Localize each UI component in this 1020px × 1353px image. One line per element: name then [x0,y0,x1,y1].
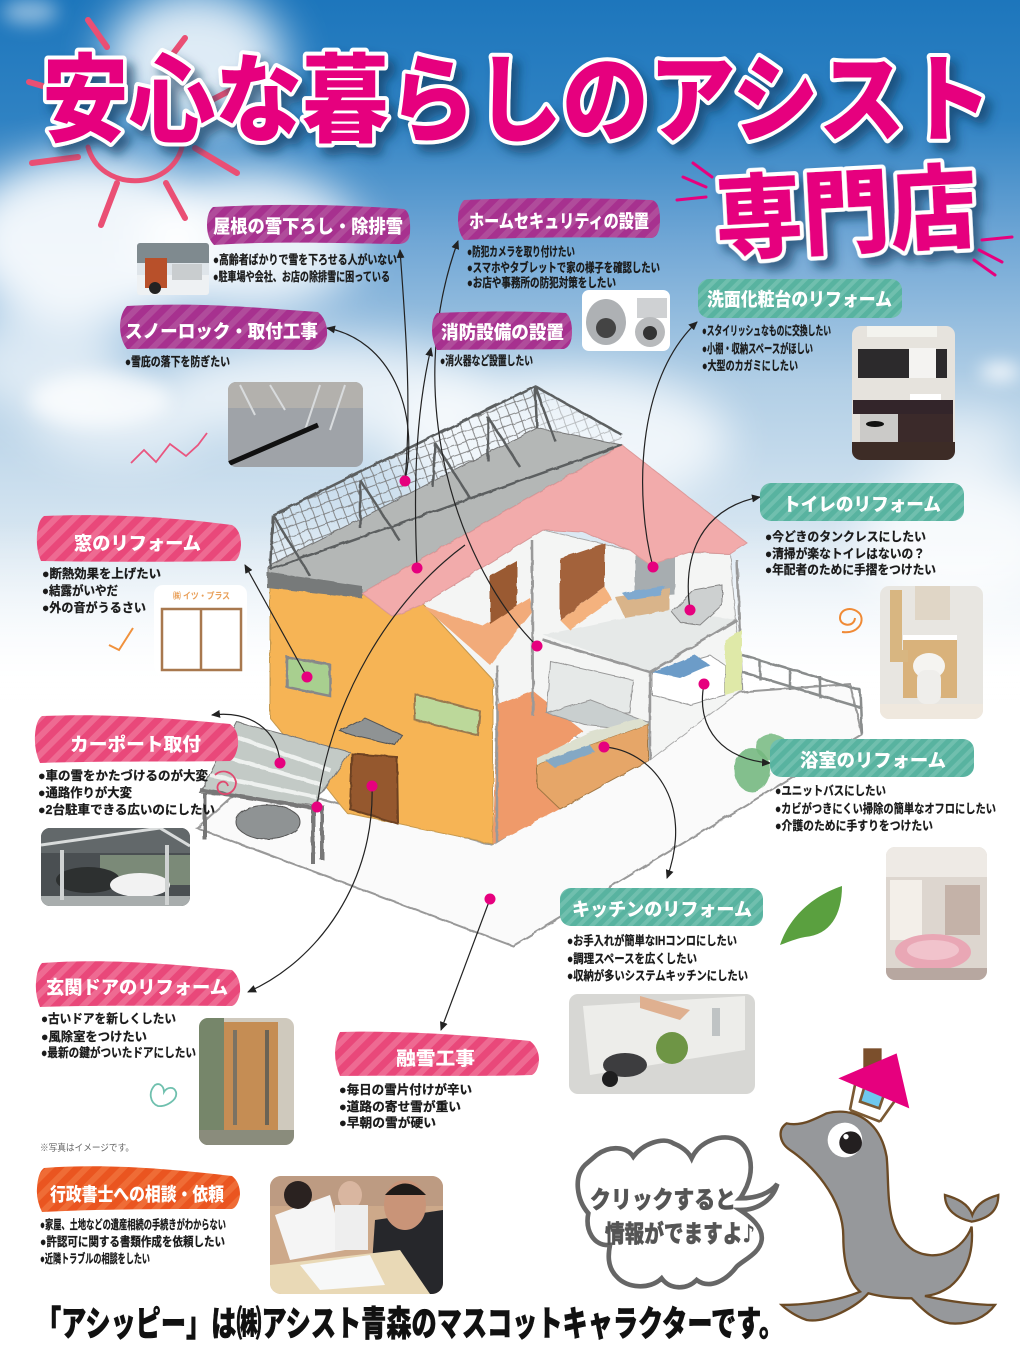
text list: ●風除室をつけたい [41,1029,147,1044]
text list: ●清掃が楽なトイレはないの？ [765,546,925,561]
callout: speech bubble [578,1137,777,1287]
title: 専門店: 専門店 [713,157,980,273]
heading: 行政書士への相談・依頼 [50,1184,224,1205]
roof: pink [362,445,747,617]
text list: ●車の雪をかたづけるのが大変 [38,768,208,783]
kitchen counter [537,724,648,809]
text list: ●高齢者ばかりで雪を下ろせる人がいない [213,252,397,267]
heading: 消防設備の設置 [441,322,564,343]
photo: door [199,1018,294,1145]
text list: ●家屋、土地などの遺産相続の手続きがわからない [40,1217,226,1232]
text list [41,1011,196,1060]
text: ●雪庇の落下を防ぎたい [125,354,230,369]
text list: ●最新の鍵がついたドアにしたい [41,1045,196,1060]
text list [765,529,936,577]
icon: teal heart [151,1084,176,1106]
text list [775,784,996,833]
text list: ●近隣トラブルの相談をしたい [40,1251,150,1266]
photo: carport [41,826,190,906]
panel: kitchen [560,888,763,1094]
panel: snow lock [120,305,363,467]
markers: magenta hot-spot dots [274,476,710,904]
text list: ●お店や事務所の防犯対策をしたい [467,275,616,290]
callout: speech bubble: 情報がでますよ♪ [605,1220,755,1248]
decoration: accent ticks around 専門店 [677,163,1012,275]
awning [340,718,402,745]
heading: 窓のリフォーム [74,533,201,554]
text list: ●介護のために手すりをつけたい [775,818,933,833]
text: ●消火器など設置したい [440,353,533,368]
text list [339,1082,472,1130]
fence net [270,386,537,565]
photo: snow lock roof [228,382,363,467]
heading [36,961,240,1007]
ground plot [197,684,862,946]
heading [35,715,238,763]
text list [213,252,397,284]
heading: 洗面化粧台のリフォーム [707,289,892,310]
photo: toilet [880,586,983,719]
heading: 屋根の雪下ろし・除排雪 [213,216,403,237]
heading: 融雪工事 [396,1048,475,1069]
text list: ●収納が多いシステムキッチンにしたい [567,968,748,983]
text list [38,768,215,817]
heading: トイレのリフォーム [783,494,941,515]
note: ※写真はイメージです。 [40,1142,134,1154]
text list: ●スタイリッシュなものに交換したい [702,323,831,338]
lower floor [493,691,583,844]
panel: window [37,515,247,675]
callout: speech bubble: クリックすると [590,1187,736,1214]
text list: ●許認可に関する書類作成を依頼したい [40,1234,225,1249]
text list: ●ユニットバスにしたい [775,784,886,798]
heading [770,739,974,777]
text list: ●外の音がうるさい [42,600,146,615]
heading: キッチンのリフォーム [572,899,752,920]
bathtub [652,655,725,705]
text list [702,323,831,373]
heading [698,279,902,318]
photo: kitchen sink [569,994,755,1094]
panel: washstand [698,279,955,460]
photo: bathroom [886,847,987,980]
icon: orange check [109,628,133,650]
text list: ●大型のカガミにしたい [702,358,798,373]
text list: ●毎日の雪片付けが辛い [339,1082,472,1097]
heading [37,1166,240,1212]
text list: ●駐車場や会社、お店の除排雪に困っている [213,269,390,284]
heading [207,205,410,245]
bathroom fixtures upper [635,552,675,598]
text list: ●結露がいやだ [42,583,118,598]
photo: snow plow [137,243,209,295]
photo: vanity [852,326,955,460]
text list: ●通路作りが大変 [38,785,132,800]
photo: security cameras [582,290,670,351]
text list: ●年配者のために手摺をつけたい [765,562,936,577]
heading [120,305,327,350]
text list [40,1217,226,1266]
heading: 浴室のリフォーム [800,750,946,771]
panel: home security [458,198,670,351]
text list: ●今どきのタンクレスにしたい [765,529,926,544]
icon: green leaf [780,886,842,945]
arrows: leader lines from house to labels [212,241,770,1030]
heading [37,515,241,562]
panel: bathroom [770,739,996,980]
living room window and sofa [547,661,633,713]
illustration: house [197,386,862,946]
heading: 玄関ドアのリフォーム [46,977,228,998]
text list: ●断熱効果を上げたい [42,566,161,581]
text list: ●お手入れが簡単なIHコンロにしたい [567,933,737,948]
text list [567,933,748,983]
heading [560,888,763,926]
panel: carport [35,715,238,906]
doors upper [490,561,517,624]
text list [42,566,161,615]
photo: window product: ㈱ イツ・プラス [173,590,230,601]
text list: ●調理スペースを広くしたい [567,951,697,966]
photo: window product [154,585,247,675]
text list: ●小棚・収納スペースがほしい [702,341,813,356]
text list: ●道路の寄せ雪が重い [339,1099,461,1114]
panel: administrative scrivener [37,1166,443,1294]
mascot: seal with house hat [781,1048,998,1324]
text list: ●スマホやタブレットで家の様子を確認したい [467,260,660,275]
panel: snow melting [335,1032,539,1130]
panel: entrance door [36,961,294,1145]
carport [200,722,350,805]
roof: grey [268,428,622,593]
heading: ホームセキュリティの設置 [469,211,649,232]
heading [760,483,964,521]
heading [458,198,660,240]
background: blue sky with clouds [0,0,1020,700]
icon: pink sun [29,20,237,225]
heading: カーポート取付 [70,734,201,755]
photo: consultation [270,1176,443,1294]
panel: roof snow removal [137,205,410,295]
text list: ●2台駐車できる広いのにしたい [38,802,215,817]
icon: orange spiral [840,609,862,632]
wall: orange exterior [270,585,493,844]
structural lines [497,540,742,842]
balcony fence right [742,655,862,735]
heading [335,1032,539,1076]
text list: ●早朝の雪が硬い [339,1115,436,1130]
panel: toilet [760,483,983,719]
text list: ●防犯カメラを取り付けたい [467,244,575,259]
heading: スノーロック・取付工事 [125,321,318,342]
panel: fire safety [432,312,572,368]
front door [350,754,398,824]
window [287,657,330,696]
interior white [423,530,742,760]
decoration: pink zigzag [131,433,207,463]
text list [467,244,660,290]
icon: pink swirl [215,771,236,794]
text list: ●古いドアを新しくしたい [41,1011,176,1026]
upper floor [423,598,533,665]
